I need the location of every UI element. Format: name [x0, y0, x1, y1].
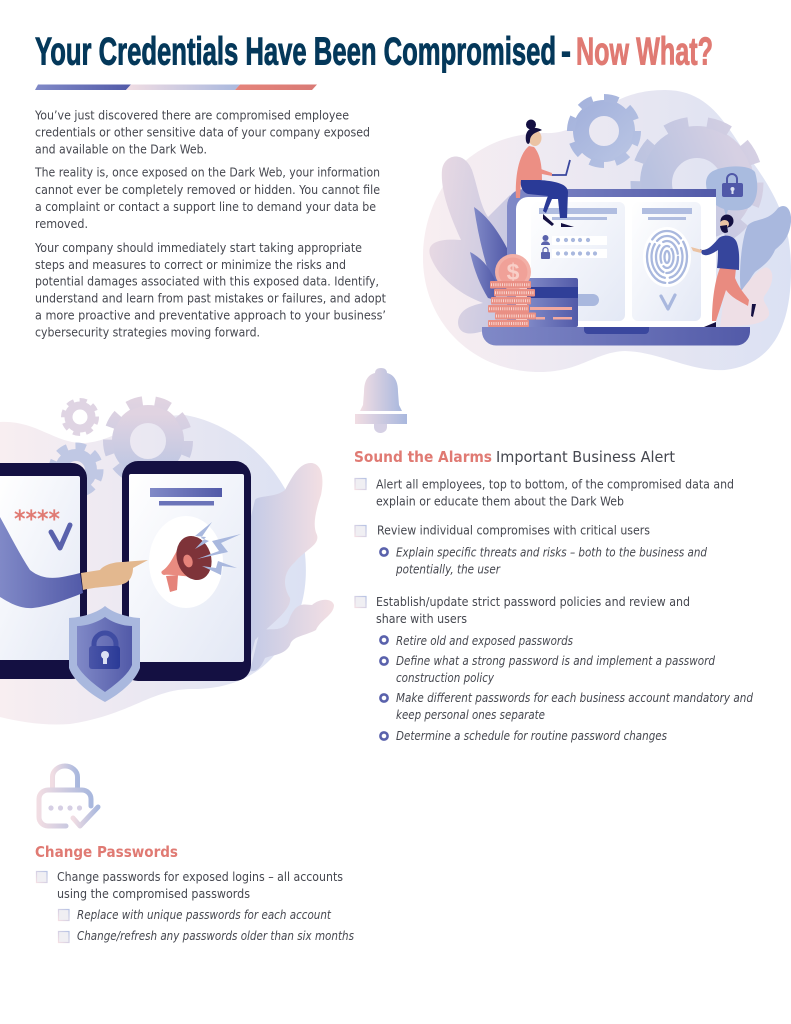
gear: medium — [52, 446, 100, 494]
title: - — [561, 30, 571, 74]
item: password policies: keep personal ones separate — [396, 708, 545, 722]
illustration: laptop login with people — [423, 90, 791, 372]
gear: large — [108, 401, 188, 481]
background blob — [423, 90, 791, 372]
left phone — [0, 463, 87, 679]
intro text block: potential damages associated with this exposed data. Identify, — [35, 274, 379, 288]
item: review compromises — [355, 524, 707, 576]
laptop lid — [507, 189, 716, 327]
heading: Sound the Alarms — [354, 448, 675, 466]
checklist: Change Passwords: Change/refresh any passwords older than six months — [77, 929, 354, 943]
item: password policies: share with users — [376, 612, 467, 626]
item: review compromises: Explain specific threats and risks – both to the business and — [396, 546, 707, 560]
intro text block: Your company should immediately start taking appropriate — [34, 241, 362, 255]
dark leaves — [470, 207, 508, 300]
laptop base — [482, 327, 750, 346]
heading: Sound the Alarms: Important Business Alert — [496, 448, 675, 466]
intro text block: a more proactive and preventative approach to your business’ — [35, 308, 386, 322]
title divider bar — [35, 84, 317, 90]
intro text block: a complaint or contact a support line to demand your data be — [35, 200, 376, 214]
intro text block: cannot ever be completely removed or hidden. You cannot file — [35, 183, 380, 197]
checklist: Change Passwords: using the compromised passwords — [57, 887, 250, 901]
title: Now What? — [576, 30, 713, 74]
fingerprint panel — [632, 202, 701, 321]
gear: large — [636, 122, 758, 244]
icon: bell — [355, 368, 407, 433]
heading: Change Passwords: Change Passwords — [35, 843, 178, 861]
intro text block: and available on the Dark Web. — [35, 142, 207, 156]
laptop screen — [516, 197, 716, 327]
credit card — [527, 278, 578, 327]
item: password policies: Retire old and exposed passwords — [396, 634, 573, 648]
item: review compromises: Review individual compromises with critical users — [377, 524, 650, 538]
woman with laptop — [516, 120, 574, 227]
checklist: Change Passwords: Replace with unique passwords for each account — [77, 908, 332, 922]
pointing arm — [0, 517, 148, 608]
dollar coin — [495, 254, 531, 290]
intro text block — [34, 108, 386, 340]
right leaves — [250, 463, 334, 671]
checklist: Sound the Alarms — [355, 478, 753, 743]
item: alert employees: explain or educate them about the Dark Web — [376, 494, 624, 508]
intro text block: steps and measures to correct or minimize the risks and — [35, 258, 346, 272]
item: alert employees: Alert all employees, top to bottom, of the compromised data and — [376, 478, 734, 492]
right phone — [122, 461, 251, 681]
coin stack — [488, 281, 536, 327]
checklist: Change Passwords — [36, 870, 354, 943]
speech bubble with lock — [706, 166, 757, 216]
intro text block: The reality is, once exposed on the Dark Web, your information — [34, 166, 380, 180]
dollar coin: $ — [507, 259, 520, 285]
left leaf — [429, 156, 510, 334]
intro text block: credentials or other sensitive data of your company exposed — [35, 126, 370, 140]
intro text block: You’ve just discovered there are compromised employee — [34, 108, 349, 122]
shield with lock — [69, 606, 140, 702]
intro text block: cybersecurity strategies moving forward. — [35, 326, 260, 340]
item: password policies: Determine a schedule for routine password changes — [396, 729, 667, 743]
man pointing — [691, 214, 756, 327]
item: password policies: construction policy — [396, 671, 495, 685]
laptop notch — [584, 327, 649, 334]
gear: small — [64, 400, 96, 434]
intro text block: removed. — [35, 217, 88, 231]
megaphone — [161, 522, 241, 592]
item: alert employees — [355, 478, 734, 508]
intro text block: understand and learn from past mistakes or failures, and adopt — [35, 292, 386, 306]
illustration: phones with alert — [0, 400, 334, 725]
item: password policies: Establish/update strict password policies and review and — [376, 595, 690, 609]
icon: padlock with check — [39, 766, 98, 826]
background blob — [0, 415, 306, 725]
gear: small — [571, 98, 637, 164]
item: password policies — [355, 595, 753, 743]
check mark — [51, 525, 70, 548]
item: password policies: Define what a strong password is and implement a password — [396, 654, 715, 668]
login panel — [531, 202, 625, 321]
heading: Sound the Alarms: Sound the Alarms — [354, 448, 492, 466]
pink leaf — [720, 267, 772, 327]
item: review compromises: potentially, the user — [395, 562, 501, 576]
checklist: Change Passwords: Change passwords for exposed logins – all accounts — [57, 870, 343, 884]
right leaf — [740, 206, 791, 291]
password stars: **** — [14, 505, 60, 533]
